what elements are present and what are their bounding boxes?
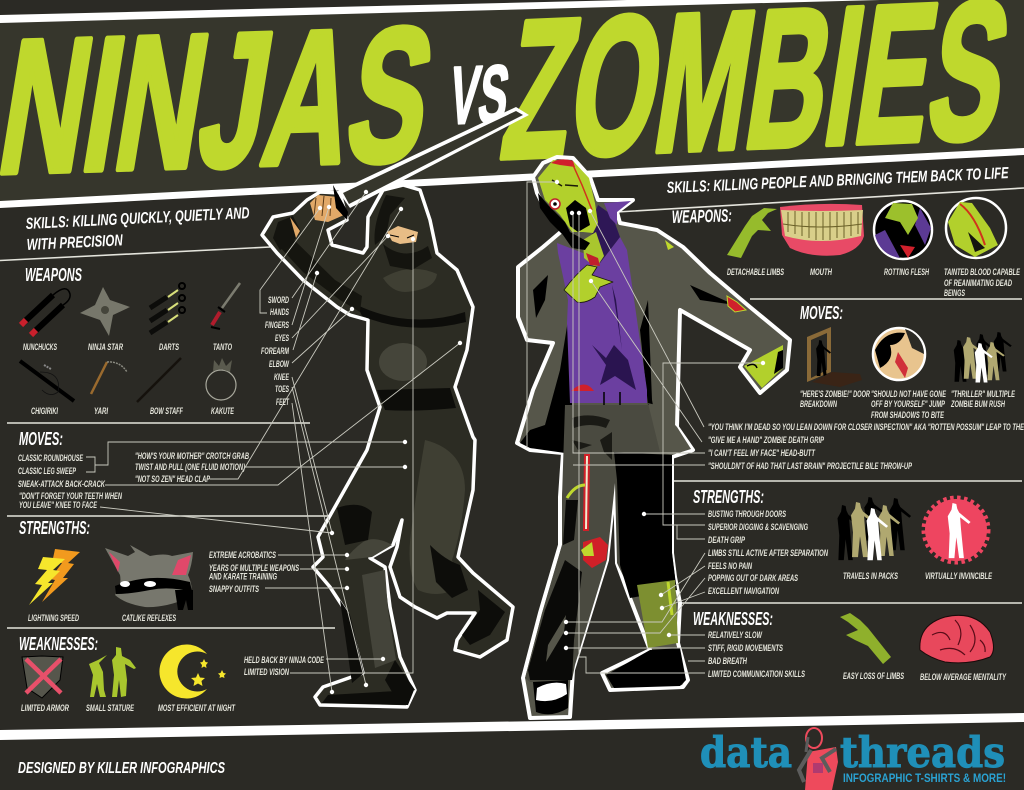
right pant leg black — [614, 452, 677, 598]
icon: virtually invincible — [924, 498, 988, 562]
strengths labels: CATLIKE REFLEXES — [122, 613, 176, 624]
back leg light — [410, 440, 465, 594]
zombie weaknesses list: LIMITED COMMUNICATION SKILLS — [708, 669, 805, 680]
zombie strengths list: EXCELLENT NAVIGATION — [708, 586, 780, 597]
popped eye — [550, 199, 560, 209]
ninja moves list: CLASSIC LEG SWEEP — [18, 466, 76, 477]
strengths labels: YEARS OF MULTIPLE WEAPONS — [209, 563, 299, 574]
body part labels: EYES — [275, 333, 289, 344]
weakness icon labels: EASY LOSS OF LIMBS — [843, 671, 904, 682]
body part labels: FINGERS — [265, 320, 289, 331]
green calf — [637, 580, 678, 648]
heading: zombie weapons: WEAPONS: — [672, 205, 732, 227]
left pant leg shadows — [528, 500, 582, 680]
weapon labels — [23, 342, 234, 417]
ninja moves list: "HOW'S YOUR MOTHER" CROTCH GRAB — [135, 451, 249, 462]
heading: moves: MOVES: — [19, 429, 63, 449]
body part labels: TOES — [275, 384, 289, 395]
zombie weaknesses list: STIFF, RIGID MOVEMENTS — [708, 643, 783, 654]
icon: detachable limb — [727, 208, 777, 258]
zombie figure — [517, 157, 790, 718]
strengths labels: SNAPPY OUTFITS — [209, 584, 259, 595]
body part labels: KNEE — [274, 372, 289, 383]
icon: darts — [150, 283, 185, 333]
ninja fold shadows — [322, 305, 505, 705]
icon: crescent moon — [159, 644, 226, 698]
icon: shield — [22, 656, 63, 698]
weakness labels: LIMITED ARMOR — [21, 703, 69, 714]
ninja weaknesses panel — [19, 634, 324, 714]
zombie strengths list: SUPERIOR DIGGING & SCAVENGING — [708, 522, 808, 533]
icon: tainted blood — [946, 198, 1006, 258]
knee wound — [583, 537, 608, 568]
ninja eye band — [387, 226, 418, 244]
ninja moves list: "DON'T FORGET YOUR TEETH WHEN — [19, 491, 123, 502]
collar — [590, 205, 620, 263]
zombie weapons labels: MOUTH — [810, 267, 833, 278]
weakness icon labels — [843, 671, 1007, 683]
ninja moves list: "NOT SO ZEN" HEAD CLAP — [135, 474, 210, 485]
body part labels: HANDS — [270, 307, 289, 318]
ninja hands — [310, 195, 344, 222]
weakness labels: HELD BACK BY NINJA CODE — [244, 655, 324, 666]
heading: zombie moves: MOVES: — [800, 303, 843, 323]
title band — [0, 0, 1024, 208]
purple shirt — [557, 237, 647, 403]
ninja figure — [262, 185, 513, 707]
icon: lightning — [29, 549, 80, 605]
zombie moves labels: "HERE'S ZOMBIE!" DOOR — [800, 389, 870, 400]
ninja moves list: TWIST AND PULL (ONE FLUID MOTION) — [135, 462, 245, 473]
icon: cat — [105, 545, 193, 610]
icon: severed hand — [840, 613, 891, 664]
zombie moves labels: OFF BY YOURSELF" JUMP — [871, 399, 945, 410]
coat tail — [648, 403, 691, 455]
zombie leader dots — [555, 180, 765, 650]
zombie strengths list — [708, 509, 829, 597]
ninja strengths panel — [19, 518, 299, 624]
body part labels: ELBOW — [269, 359, 290, 370]
ninja leader lines and labels — [86, 190, 462, 694]
zombie moves labels — [708, 389, 1024, 472]
zombie weapons labels: DETACHABLE LIMBS — [727, 267, 784, 278]
weakness labels: MOST EFFICIENT AT NIGHT — [158, 703, 236, 714]
lower front leg light — [362, 570, 396, 668]
heading: zombie strengths: STRENGTHS: — [693, 487, 764, 507]
zombie weapons panel — [672, 198, 1020, 299]
weapon labels: NINJA STAR — [88, 342, 123, 353]
body part labels — [261, 295, 290, 408]
heading: weapons: WEAPONS — [25, 265, 82, 285]
strengths icon labels — [843, 571, 992, 582]
ninja moves list — [18, 451, 249, 511]
logo figure — [799, 728, 838, 790]
icon: brain — [920, 615, 994, 663]
strengths labels: EXTREME ACROBATICS — [209, 550, 276, 561]
icon: tanto — [211, 283, 240, 329]
zombie moves labels: BREAKDOWN — [800, 399, 838, 410]
icon: shadow bite — [873, 328, 925, 380]
weakness labels: LIMITED VISION — [244, 667, 290, 678]
zombie weaknesses list: BAD BREATH — [708, 656, 748, 667]
zombie hand on chest — [564, 265, 613, 302]
weapon labels: BOW STAFF — [150, 406, 183, 417]
weapon labels: KAKUTE — [211, 406, 234, 417]
icon: nunchucks — [21, 289, 70, 335]
zombie weapons labels: BEINGS — [944, 288, 965, 299]
left skills heading: SKILLS: KILLING QUICKLY, QUIETLY AND — [25, 205, 250, 233]
logo word: data: data — [700, 728, 792, 777]
zombie head — [538, 160, 598, 233]
left skills heading: WITH PRECISION — [26, 232, 123, 254]
zombie weapons labels — [727, 267, 1020, 299]
heading: strengths: STRENGTHS: — [19, 518, 90, 538]
zombie moves labels: "GIVE ME A HAND" ZOMBIE DEATH GRIP — [708, 435, 824, 446]
ninja moves list: SNEAK-ATTACK BACK-CRACK — [18, 479, 106, 490]
zombie weapons labels: ROTTING FLESH — [884, 267, 930, 278]
leader lines — [86, 192, 460, 692]
strengths labels — [28, 550, 299, 624]
zombie moves panel — [708, 303, 1024, 472]
zombie weaknesses list — [708, 630, 805, 680]
zombie leader lines and dots — [527, 180, 765, 673]
sword guard — [333, 185, 348, 220]
weakness labels — [21, 655, 324, 714]
icon: travels in packs — [838, 497, 911, 560]
zombie strengths panel — [693, 487, 992, 597]
ninja weapons panel — [20, 265, 240, 417]
zombie strengths list: FEELS NO PAIN — [708, 561, 753, 572]
body part labels: FEET — [276, 397, 290, 408]
zombie moves labels: "SHOULD NOT HAVE GONE — [871, 389, 946, 400]
ninja moves list: YOU LEAVE" KNEE TO FACE — [19, 500, 97, 511]
icon: zombie horde — [954, 332, 1012, 382]
icon: door breakdown — [807, 327, 862, 387]
belly light — [379, 343, 427, 381]
strengths labels: AND KARATE TRAINING — [208, 572, 277, 582]
elbow wound — [727, 296, 746, 312]
icon: yari — [91, 362, 127, 394]
zombie moves labels: "I CAN'T FEEL MY FACE" HEAD-BUTT — [708, 448, 816, 459]
leader dots — [315, 190, 462, 694]
weakness labels: SMALL STATURE — [86, 703, 134, 714]
zombie right hand — [744, 345, 783, 388]
coat shadows — [520, 275, 735, 453]
footer band — [0, 713, 1024, 740]
heading: weaknesses: WEAKNESSES: — [19, 634, 98, 654]
weapon labels: YARI — [94, 406, 108, 417]
body part labels: SWORD — [268, 295, 289, 306]
weapon labels: DARTS — [159, 342, 179, 353]
strengths icon labels: TRAVELS IN PACKS — [843, 571, 898, 582]
body part labels: FOREARM — [261, 346, 290, 357]
icon: bow staff — [137, 358, 181, 402]
zombie moves labels: FROM SHADOWS TO BITE — [871, 410, 944, 421]
strengths labels: LIGHTNING SPEED — [28, 613, 79, 624]
weapon labels: CHIGIRIKI — [31, 406, 58, 417]
zombie strengths list: BUSTING THROUGH DOORS — [708, 509, 786, 520]
zombie weaknesses list: RELATIVELY SLOW — [708, 630, 763, 641]
zombie boot — [606, 648, 686, 688]
neck — [583, 232, 604, 268]
zombie strengths list: POPPING OUT OF DARK AREAS — [708, 573, 798, 584]
weapon labels: NUNCHUCKS — [23, 342, 57, 353]
sneaker — [533, 680, 568, 714]
ninja moves panel — [18, 429, 249, 511]
left skills heading — [25, 205, 250, 254]
icon: mouth — [780, 204, 864, 256]
pants — [525, 405, 675, 682]
icon: kakute — [206, 358, 236, 400]
logo: data threads — [700, 728, 1006, 790]
ninja sword — [270, 107, 529, 233]
zombie weaknesses panel — [693, 609, 1007, 683]
zombie strengths list: DEATH GRIP — [708, 535, 745, 546]
title: VS — [445, 48, 514, 142]
credit: DESIGNED BY KILLER INFOGRAPHICS — [18, 760, 225, 777]
zombie strengths list: LIMBS STILL ACTIVE AFTER SEPARATION — [708, 548, 829, 559]
icon: chigiriki — [20, 361, 74, 401]
heading: zombie weaknesses: WEAKNESSES: — [693, 609, 773, 629]
weapon labels: TANTO — [213, 342, 232, 353]
icon: rotting flesh — [874, 201, 932, 259]
logo word: threads: threads — [840, 728, 1005, 777]
bone wound — [584, 455, 589, 530]
ninja moves list: CLASSIC ROUNDHOUSE — [18, 453, 83, 464]
icon: small stature — [89, 647, 136, 697]
icon: ninja star — [80, 287, 130, 336]
